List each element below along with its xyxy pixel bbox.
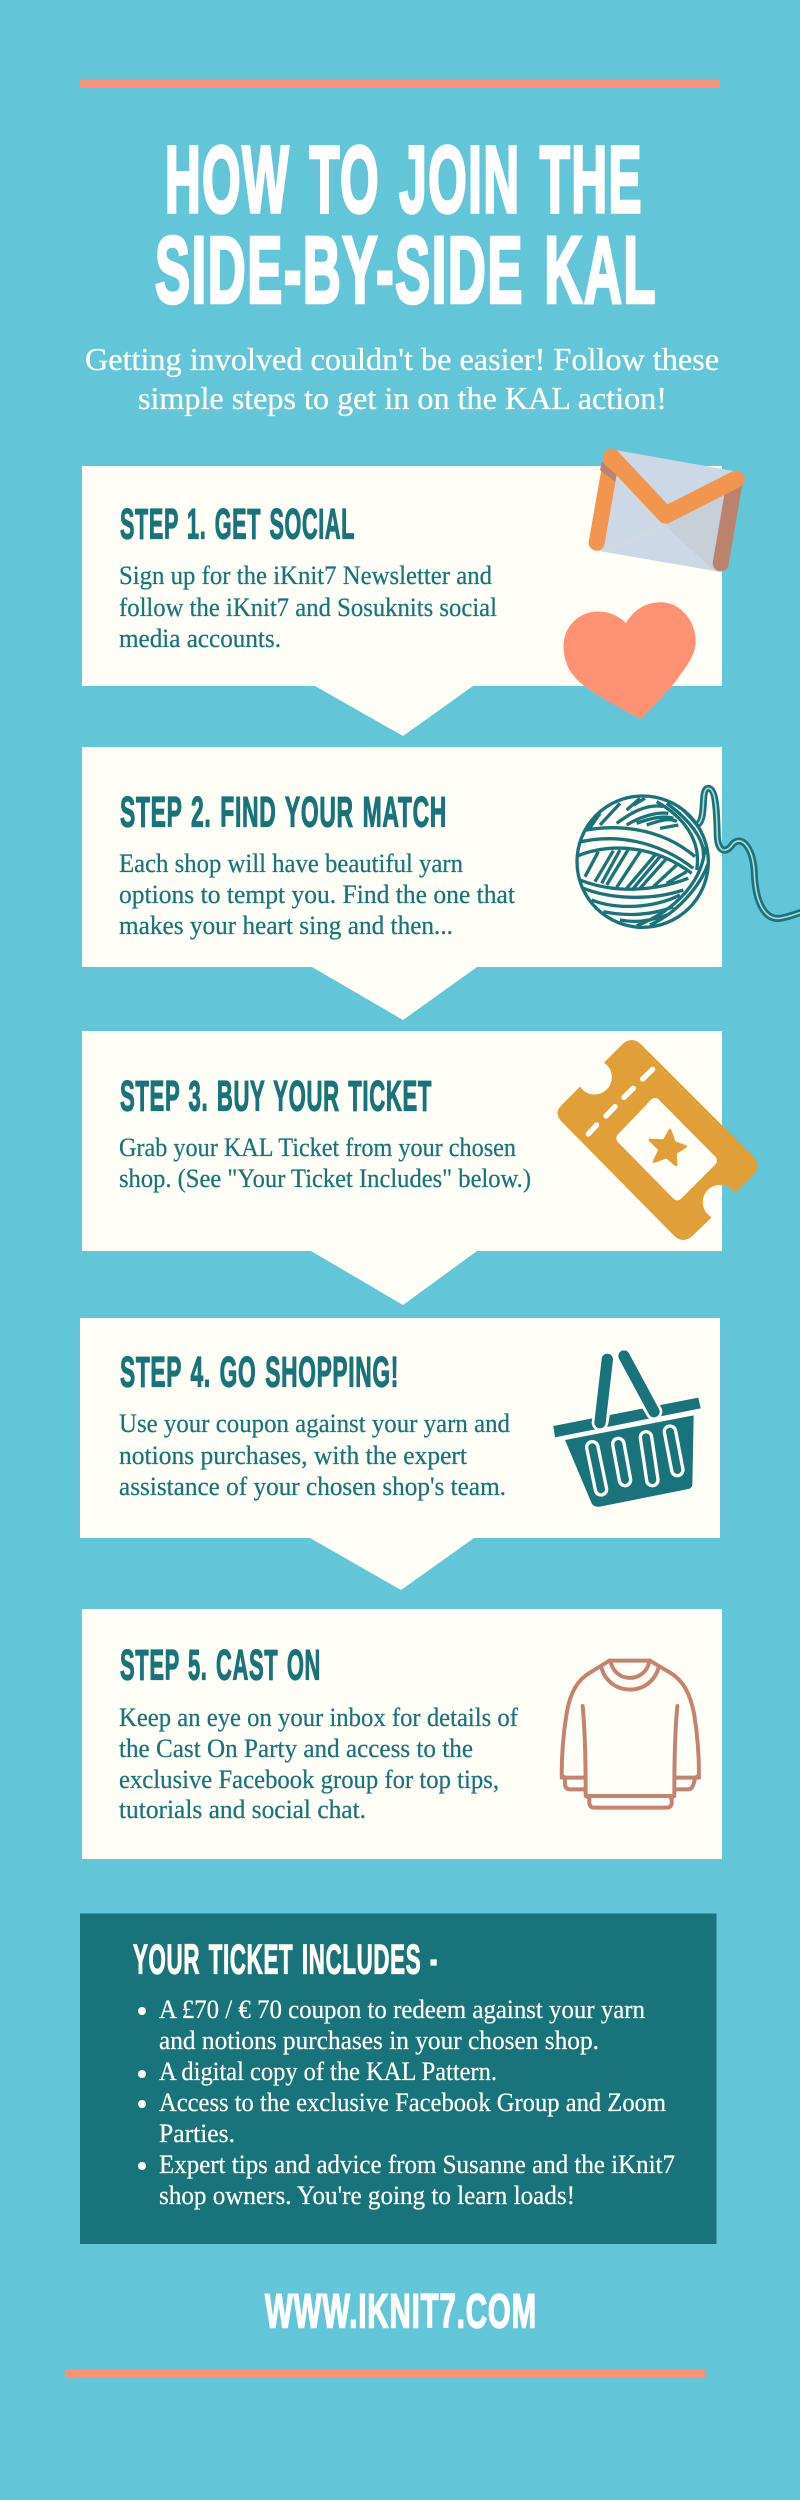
subtitle: Getting involved couldn't be easier! Follow these (85, 341, 719, 377)
top accent bar (80, 80, 720, 88)
step 4 heading: STEP 4. GO SHOPPING! (120, 1348, 399, 1396)
title (155, 127, 657, 324)
ticket panel background (80, 1914, 716, 2244)
step 1 text: follow the iKnit7 and Sosuknits social (119, 593, 497, 622)
step 4 text: assistance of your chosen shop's team. (119, 1472, 506, 1501)
step 4 card (80, 1318, 720, 1590)
subtitle: simple steps to get in on the KAL action! (138, 380, 667, 416)
step 2 card (82, 747, 722, 1020)
icon: sweater (562, 1661, 699, 1808)
step 2 text: makes your heart sing and then... (119, 911, 453, 940)
ticket panel list: A digital copy of the KAL Pattern. (159, 2057, 497, 2086)
panel: step 2 (82, 747, 800, 1020)
step 5 text: exclusive Facebook group for top tips, (119, 1765, 499, 1794)
ticket panel list: Parties. (159, 2119, 235, 2148)
step 2 text: Each shop will have beautiful yarn (119, 849, 463, 878)
step 1 text: Sign up for the iKnit7 Newsletter and (119, 561, 492, 590)
step 1 heading: STEP 1. GET SOCIAL (120, 500, 355, 548)
step 2 heading: STEP 2. FIND YOUR MATCH (120, 788, 447, 836)
icon: shopping basket (553, 1356, 701, 1507)
step 3 text: shop. (See "Your Ticket Includes" below.) (119, 1164, 531, 1193)
panel: your ticket includes (80, 1914, 716, 2244)
ticket panel list: Expert tips and advice from Susanne and the iKnit7 (159, 2150, 675, 2179)
panel: step 5 (82, 1609, 722, 1859)
step 1 card (82, 466, 722, 736)
step 5 text (119, 1703, 518, 1824)
step 4 text (119, 1409, 510, 1501)
bottom accent bar (65, 2370, 705, 2378)
ticket panel list (159, 1995, 675, 2210)
step 5 text: the Cast On Party and access to the (119, 1734, 473, 1763)
icon: heart (563, 602, 696, 719)
step 1 text: media accounts. (119, 624, 281, 653)
step 2 text: options to tempt you. Find the one that (119, 880, 516, 909)
icon: envelope (597, 449, 742, 572)
step 2 text (119, 849, 516, 940)
panel: step 1 (82, 449, 742, 736)
panel: step 4 (80, 1318, 720, 1590)
website url: WWW.IKNIT7.COM (265, 2286, 537, 2338)
step 5 heading: STEP 5. CAST ON (120, 1642, 321, 1690)
ticket panel list: Access to the exclusive Facebook Group and Zoom (159, 2088, 666, 2117)
step 3 text: Grab your KAL Ticket from your chosen (119, 1133, 516, 1162)
ticket panel list: shop owners. You're going to learn loads! (159, 2181, 575, 2210)
step 3 heading: STEP 3. BUY YOUR TICKET (120, 1072, 432, 1120)
icon: ball of yarn (577, 788, 800, 927)
panel: step 3 (82, 1031, 757, 1305)
step 3 card (82, 1031, 722, 1305)
step 4 text: Use your coupon against your yarn and (119, 1409, 510, 1438)
subtitle (85, 341, 719, 416)
step 3 text (119, 1133, 531, 1193)
step 5 text: tutorials and social chat. (119, 1795, 366, 1824)
step 1 text (119, 561, 497, 653)
step 5 text: Keep an eye on your inbox for details of (119, 1703, 518, 1732)
ticket panel list: and notions purchases in your chosen shop. (159, 2026, 599, 2055)
ticket panel bullets (138, 2007, 146, 2170)
icon: ticket (557, 1040, 757, 1240)
ticket panel heading: YOUR TICKET INCLUDES - (133, 1936, 438, 1982)
step 5 card (82, 1609, 722, 1859)
step 4 text: notions purchases, with the expert (119, 1441, 468, 1470)
ticket panel list: A £70 / € 70 coupon to redeem against your yarn (159, 1995, 645, 2024)
